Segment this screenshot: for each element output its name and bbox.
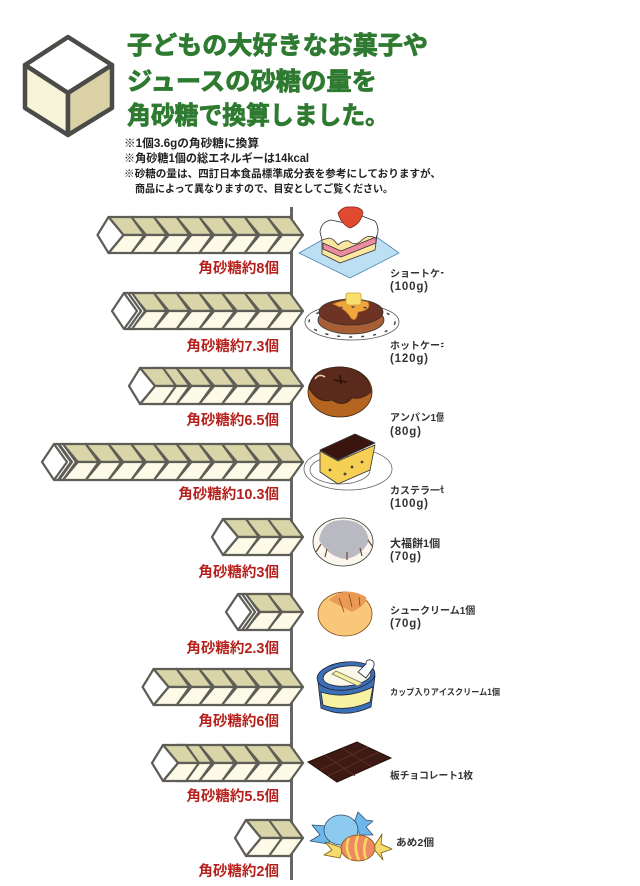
row: anpan cubes <box>129 368 303 404</box>
icon: large sugar cube <box>25 37 112 135</box>
label: castella: (100g) <box>390 498 428 510</box>
row: ice cream cubes <box>143 669 303 705</box>
row: daifuku cubes <box>212 519 303 555</box>
label: sugar 8: 角砂糖約8個 <box>198 259 279 277</box>
label: ice cream: カップ入りアイスクリーム1個 <box>390 686 500 697</box>
icon: ice cream cup <box>316 659 376 713</box>
label: cream puff <box>390 604 475 630</box>
notes text block: 商品によって異なりますので、目安としてご覧ください。 <box>135 182 393 195</box>
label: castella: カステラ一切 <box>390 485 450 497</box>
label: castella <box>390 485 444 510</box>
label: shortcake: ショートケーキ <box>390 268 460 280</box>
icon: chocolate bar <box>308 742 391 782</box>
icon: cream puff <box>318 592 372 636</box>
label: chocolate: 板チョコレート1枚 <box>390 769 473 782</box>
title: ジュースの砂糖の量を <box>127 68 377 96</box>
notes text block: ※砂糖の量は、四訂日本食品標準成分表を参考にしておりますが、 <box>124 167 441 180</box>
label: sugar 6: 角砂糖約6個 <box>198 712 279 730</box>
icon: pancake <box>305 293 399 340</box>
label: sugar 2: 角砂糖約2個 <box>198 862 279 880</box>
label: sugar 6.5: 角砂糖約6.5個 <box>186 411 279 429</box>
label: daifuku <box>390 536 440 563</box>
icon: candies <box>310 812 392 861</box>
label: sugar 3: 角砂糖約3個 <box>198 563 279 581</box>
label: candy: あめ2個 <box>396 836 434 849</box>
label: sugar 5.5: 角砂糖約5.5個 <box>186 787 279 805</box>
row: cream puff cubes <box>226 594 303 630</box>
label: anpan: アンパン1個 <box>390 411 446 424</box>
label: anpan <box>390 412 444 438</box>
label: anpan: (80g) <box>390 426 421 438</box>
label: cream puff: (70g) <box>390 618 421 630</box>
label: pancake: ホットケーキ <box>390 340 450 352</box>
title: 子どもの大好きなお菓子や <box>127 32 428 60</box>
label: sugar 7.3: 角砂糖約7.3個 <box>186 337 279 355</box>
row: pancake cubes <box>112 293 303 329</box>
row: candy cubes <box>235 820 303 856</box>
row: shortcake cubes <box>98 217 303 253</box>
label: cream puff: シュークリーム1個 <box>390 604 475 617</box>
row: chocolate cubes <box>152 745 303 781</box>
icon: castella <box>304 434 392 490</box>
title <box>127 32 428 130</box>
label: pancake <box>390 340 444 364</box>
notes text block: ※角砂糖1個の総エネルギーは14kcal <box>124 151 309 165</box>
title: 角砂糖で換算しました。 <box>127 102 389 130</box>
icon: anpan <box>308 367 372 417</box>
icon: daifuku <box>313 518 373 566</box>
label: pancake: (120g) <box>390 353 428 365</box>
notes text block <box>124 136 441 195</box>
row: castella cubes <box>42 444 303 480</box>
notes text block: ※1個3.6gの角砂糖に換算 <box>124 136 259 150</box>
vertical axis line <box>290 207 293 880</box>
label: daifuku: (70g) <box>390 551 421 563</box>
label: daifuku: 大福餅1個 <box>390 536 440 550</box>
label: shortcake: (100g) <box>390 281 428 293</box>
label: sugar 10.3: 角砂糖約10.3個 <box>178 485 279 503</box>
label: shortcake <box>390 268 444 292</box>
label: sugar 2.3: 角砂糖約2.3個 <box>186 639 279 657</box>
icon: shortcake <box>299 207 399 278</box>
